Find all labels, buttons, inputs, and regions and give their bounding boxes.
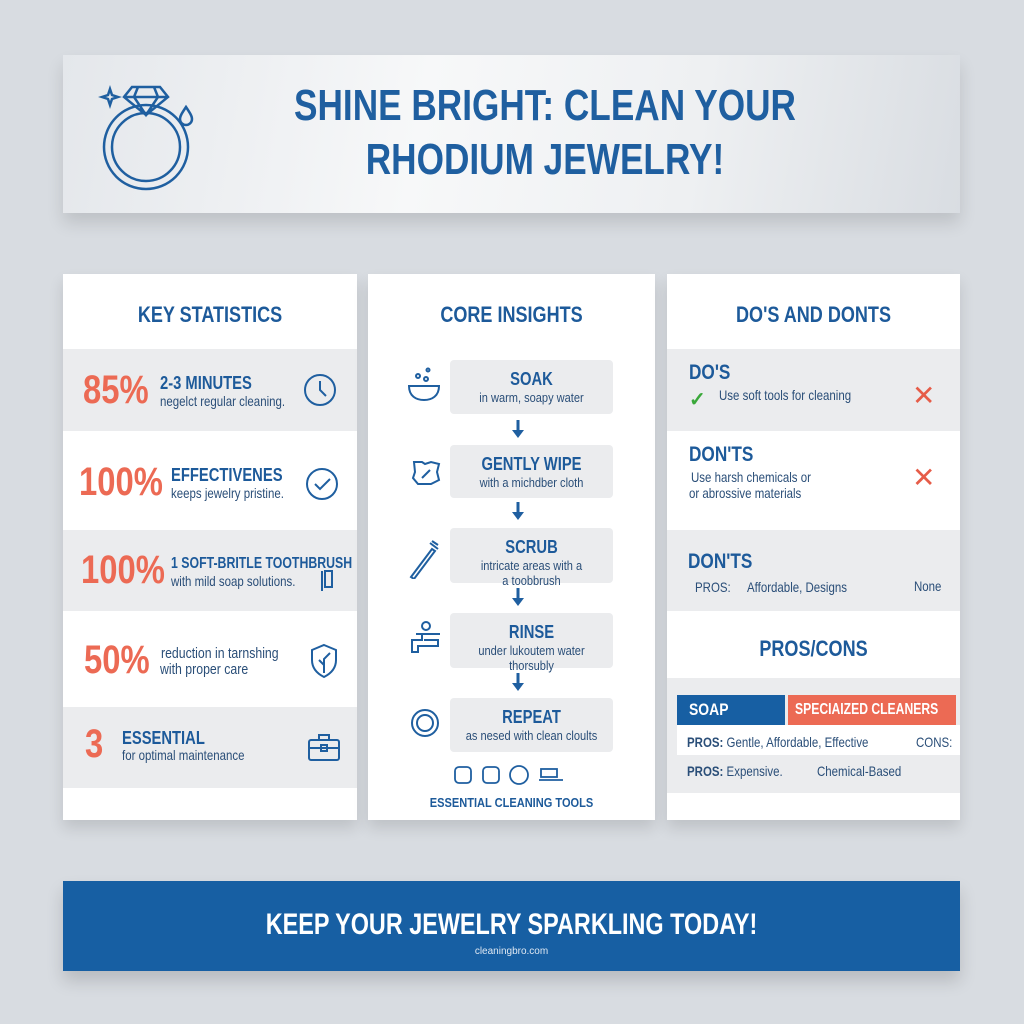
panel: do's and donts xyxy=(667,274,960,820)
stat row 2: 100% xyxy=(79,460,163,504)
don'ts row 2: PROS: xyxy=(695,579,731,595)
arrow xyxy=(512,502,524,520)
stat row 2: keeps jewelry pristine. xyxy=(171,485,284,501)
step: gently wipe: GENTLY WIPE xyxy=(481,454,582,474)
don'ts row 2: DON'TS xyxy=(688,550,752,573)
panel: core insights xyxy=(368,274,655,820)
step: soak xyxy=(450,360,613,414)
title xyxy=(294,81,796,184)
icon: toothbrush xyxy=(410,540,438,579)
don'ts row: or abrossive materials xyxy=(689,485,801,501)
pros/cons table: SPECIAIZED CLEANERS xyxy=(795,701,938,718)
title: SHINE BRIGHT: CLEAN YOUR xyxy=(294,81,796,130)
arrow xyxy=(512,420,524,438)
header banner xyxy=(63,55,960,213)
step: repeat: as nesed with clean cloults xyxy=(466,728,597,743)
step: scrub: intricate areas with a xyxy=(481,558,582,573)
pros/cons table: SOAP xyxy=(689,700,729,719)
pros/cons table xyxy=(667,678,960,793)
step: soak: SOAK xyxy=(510,369,553,389)
step: gently wipe xyxy=(450,445,613,498)
don'ts row: ✕ xyxy=(912,462,935,493)
don'ts row 2: Affordable, Designs xyxy=(747,579,847,595)
step: repeat xyxy=(450,698,613,752)
icon: ring with diamond xyxy=(98,85,194,190)
step: scrub: a toobbrush xyxy=(502,573,561,588)
do's row: DO'S xyxy=(689,361,730,384)
tools caption: ESSENTIAL CLEANING TOOLS xyxy=(430,795,593,810)
arrow xyxy=(512,588,524,606)
heading: pros/cons: PROS/CONS xyxy=(759,636,868,661)
stat row 4: 50% xyxy=(84,638,150,682)
pros/cons table: PROS: Gentle, Affordable, Effective xyxy=(687,734,868,750)
stat row 5: ESSENTIAL xyxy=(122,728,205,748)
stat row 4: with proper care xyxy=(160,661,248,678)
heading: do's and donts: DO'S AND DONTS xyxy=(736,302,891,327)
stat row 1 xyxy=(63,349,357,431)
icon: repeat xyxy=(411,709,439,737)
step: rinse: RINSE xyxy=(509,622,554,642)
footer banner xyxy=(63,881,960,971)
tools icons xyxy=(454,765,563,785)
step: rinse: under lukoutem water xyxy=(478,643,585,658)
icon: cloth xyxy=(412,461,440,485)
step: repeat: REPEAT xyxy=(502,707,561,727)
icon: faucet xyxy=(411,621,440,653)
stat row 1: 2-3 MINUTES xyxy=(160,373,252,393)
title: RHODIUM JEWELRY! xyxy=(366,135,724,184)
heading: key statistics: KEY STATISTICS xyxy=(138,302,282,327)
pros/cons table: Chemical-Based xyxy=(817,763,901,779)
don'ts row xyxy=(689,443,935,501)
stat row 1: negelct regular cleaning. xyxy=(160,393,285,409)
stat row 5: 3 xyxy=(85,722,103,766)
stat row 5 xyxy=(63,707,357,788)
don'ts row: DON'TS xyxy=(689,443,753,466)
icon: bowl xyxy=(408,368,440,401)
arrow xyxy=(512,673,524,691)
do's row: ✓ xyxy=(689,389,706,411)
do's row: Use soft tools for cleaning xyxy=(719,387,851,403)
don'ts row 2: None xyxy=(914,578,941,594)
pros/cons table: PROS: Expensive. xyxy=(687,763,783,779)
stat row 4 xyxy=(84,638,337,682)
stat row 4: reduction in tarnshing xyxy=(161,645,279,662)
step: rinse xyxy=(450,613,613,668)
step: scrub: SCRUB xyxy=(505,537,558,557)
heading: core insights: CORE INSIGHTS xyxy=(440,302,583,327)
footer url: cleaningbro.com xyxy=(475,946,548,957)
stat row 3: 1 SOFT-BRITLE TOOTHBRUSH xyxy=(171,555,352,572)
step: scrub xyxy=(450,528,613,583)
pros/cons table: CONS: xyxy=(916,734,952,750)
step: rinse: thorsubly xyxy=(509,658,554,673)
stat row 1: 85% xyxy=(83,368,149,412)
step: soak: in warm, soapy water xyxy=(479,390,584,405)
stat row 5: for optimal maintenance xyxy=(122,747,245,763)
stat row 3 xyxy=(63,530,357,611)
stat row 3: 100% xyxy=(81,548,165,592)
panel: key statistics xyxy=(63,274,357,820)
don'ts row 2 xyxy=(667,530,960,611)
don'ts row: Use harsh chemicals or xyxy=(691,469,811,485)
footer text: KEEP YOUR JEWELRY SPARKLING TODAY! xyxy=(266,908,757,941)
stat row 2 xyxy=(79,460,338,504)
stat row 2: EFFECTIVENES xyxy=(171,465,283,485)
stat row 3: with mild soap solutions. xyxy=(171,573,295,589)
do's row xyxy=(667,349,960,431)
do's row: ✕ xyxy=(912,380,935,411)
step: gently wipe: with a michdber cloth xyxy=(480,475,583,490)
